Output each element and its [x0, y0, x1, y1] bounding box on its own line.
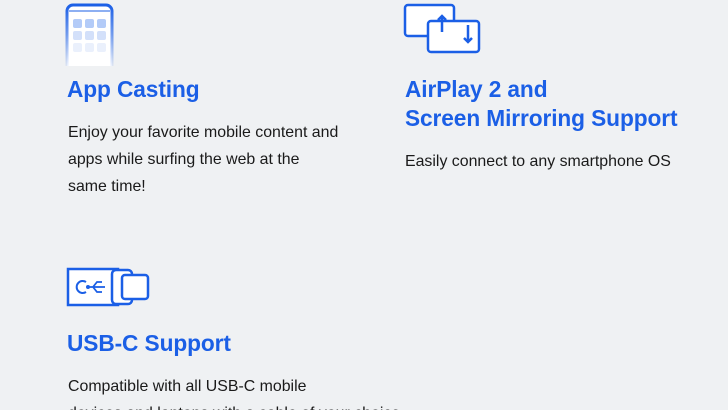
- text: app casting description: Enjoy your favorite mobile content and: [68, 124, 338, 141]
- icon: usb-c: [66, 268, 150, 306]
- text: usb-c description: [68, 378, 400, 410]
- title: AirPlay 2: Screen Mirroring Support: [405, 105, 677, 131]
- title: USB-C Support: USB-C Support: [67, 330, 231, 356]
- text: app casting description: [68, 124, 338, 195]
- icon: phone with apps: [66, 4, 114, 66]
- title: App Casting: App Casting: [67, 76, 200, 102]
- title: AirPlay 2: AirPlay 2 and: [405, 76, 547, 102]
- text: app casting description: apps while surfing the web at the: [68, 151, 299, 168]
- text: app casting description: same time!: [68, 178, 146, 195]
- text: usb-c description: Compatible with all USB-C mobile: [68, 378, 306, 395]
- title: AirPlay 2: [405, 76, 678, 131]
- icon: screen mirroring swap: [404, 4, 480, 54]
- text: airplay description: Easily connect to any smartphone OS: [405, 153, 671, 170]
